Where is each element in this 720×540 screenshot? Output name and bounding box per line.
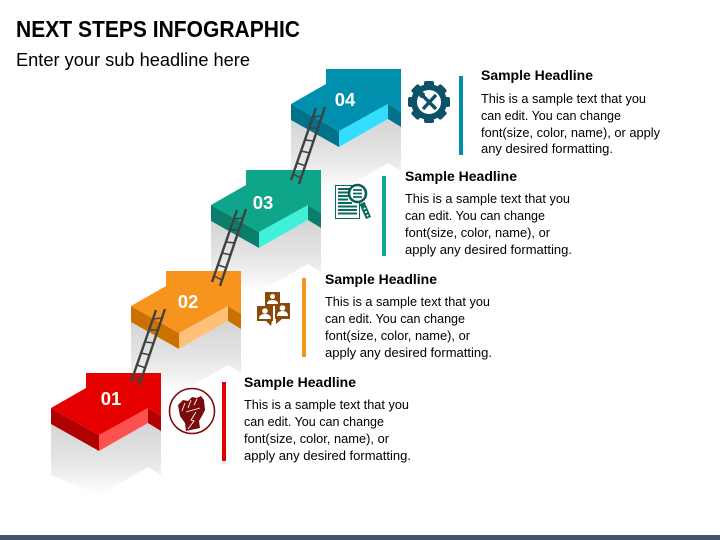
text block 03: can edit. You can change: [405, 209, 545, 223]
text block 02: font(size, color, name), or: [325, 329, 470, 343]
ladder 3: [291, 107, 325, 184]
text block 02: apply any desired formatting.: [325, 346, 492, 360]
text block 03: font(size, color, name), or: [405, 226, 550, 240]
text block 02: can edit. You can change: [325, 312, 465, 326]
text block 01: Sample Headline: [244, 374, 356, 390]
text block 04: This is a sample text that you: [481, 92, 646, 106]
text block 01: can edit. You can change: [244, 415, 384, 429]
step 03 arrow block: [211, 170, 321, 292]
text block 04: any desired formatting.: [481, 142, 613, 156]
text block 01: This is a sample text that you: [244, 398, 409, 412]
accent bar 02: [302, 278, 306, 357]
text block 01: [244, 374, 411, 463]
title: NEXT STEPS INFOGRAPHIC: [16, 16, 300, 42]
number 03: 03: [253, 192, 273, 213]
accent bar 01: [222, 382, 226, 461]
text block 04: Sample Headline: [481, 67, 593, 83]
text block 04: can edit. You can change: [481, 109, 621, 123]
ladder 2: [212, 209, 246, 286]
accent bar 03: [382, 176, 386, 256]
footer bar: [0, 535, 720, 540]
text block 03: apply any desired formatting.: [405, 243, 572, 257]
text block 03: This is a sample text that you: [405, 192, 570, 206]
text block 02: [325, 271, 492, 360]
subtitle: Enter your sub headline here: [16, 50, 250, 70]
number 01: 01: [101, 388, 121, 409]
icon: raised fist: [170, 388, 214, 434]
icon: people speech bubbles: [257, 292, 290, 326]
text block 02: This is a sample text that you: [325, 295, 490, 309]
number 02: 02: [178, 291, 198, 312]
text block 01: font(size, color, name), or: [244, 432, 389, 446]
step 01 arrow block: [51, 373, 161, 495]
icon: document with magnifier: [336, 185, 368, 218]
number 04: 04: [335, 89, 356, 110]
text block 03: [405, 168, 572, 257]
text block 02: Sample Headline: [325, 271, 437, 287]
text block 04: [481, 67, 661, 156]
ladder 1: [131, 309, 165, 386]
text block 01: apply any desired formatting.: [244, 449, 411, 463]
accent bar 04: [459, 76, 463, 155]
step 02 arrow block: [131, 271, 241, 393]
icon: gear with tools: [408, 81, 450, 123]
text block 04: font(size, color, name), or apply: [481, 126, 661, 140]
step 04 arrow block: [291, 69, 401, 191]
text block 03: Sample Headline: [405, 168, 517, 184]
